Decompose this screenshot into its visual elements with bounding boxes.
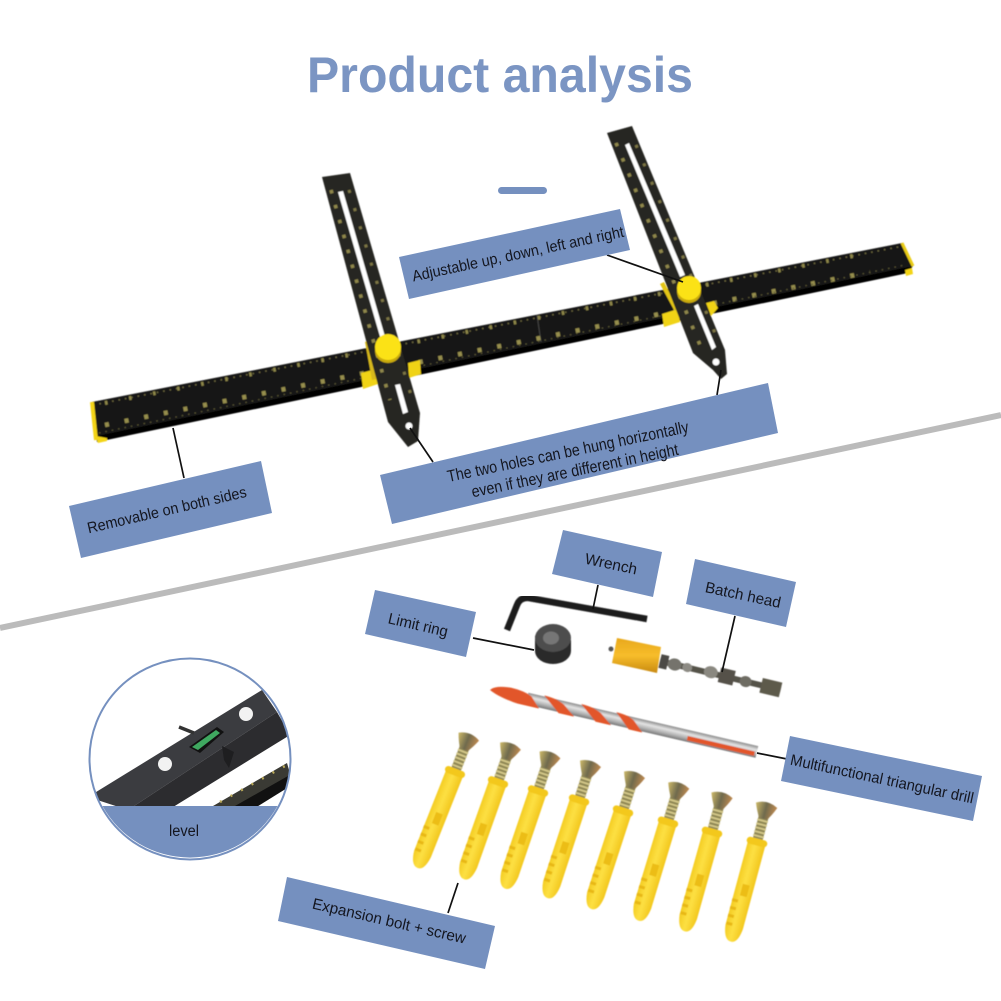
callout: expansion bolt: Expansion bolt + screw [311,896,468,948]
callout: removable [69,461,272,558]
callout: two holes: even if they are different in height [470,441,680,501]
callout: adjustable [399,209,630,299]
yellow clips [361,282,718,389]
detail circle: level [88,657,293,861]
left knob [375,334,401,363]
circle photo [96,690,289,806]
callout: limit ring: Limit ring [386,610,450,641]
callout: wrench: Wrench [583,551,639,578]
yellow end caps [92,243,913,443]
callout: wrench [552,530,662,597]
wrench [507,598,647,630]
leader lines: upper section [173,255,721,478]
callout: batch head: Batch head [704,579,782,612]
right knob [677,276,701,303]
section divider [0,415,1001,628]
title: Product analysis [307,47,693,103]
left arm [322,173,420,447]
callout: batch head [686,559,796,627]
callout: adjustable: Adjustable up, down, left and right [411,224,626,285]
caption: level [169,823,199,840]
circle outline [90,658,290,860]
blue caption segment [102,806,278,858]
expansion bolts [407,730,778,944]
callout: removable: Removable on both sides [86,484,249,537]
callout: two holes [380,383,778,524]
ruler bar [92,243,913,442]
callout: expansion bolt [278,877,495,969]
batch head bit [608,638,782,697]
right arm [607,126,727,379]
tool: long ruler with two sliding arms [92,126,913,447]
accent dash [498,187,547,194]
limit ring [535,624,571,664]
callout: multifunctional drill [781,736,982,821]
leader lines: lower section [448,585,787,913]
callout: multifunctional drill: Multifunctional triangular drill [789,752,975,807]
triangular drill bit [488,683,758,759]
callout: two holes: The two holes can be hung horizontally [446,418,691,486]
callout: limit ring [365,590,476,657]
